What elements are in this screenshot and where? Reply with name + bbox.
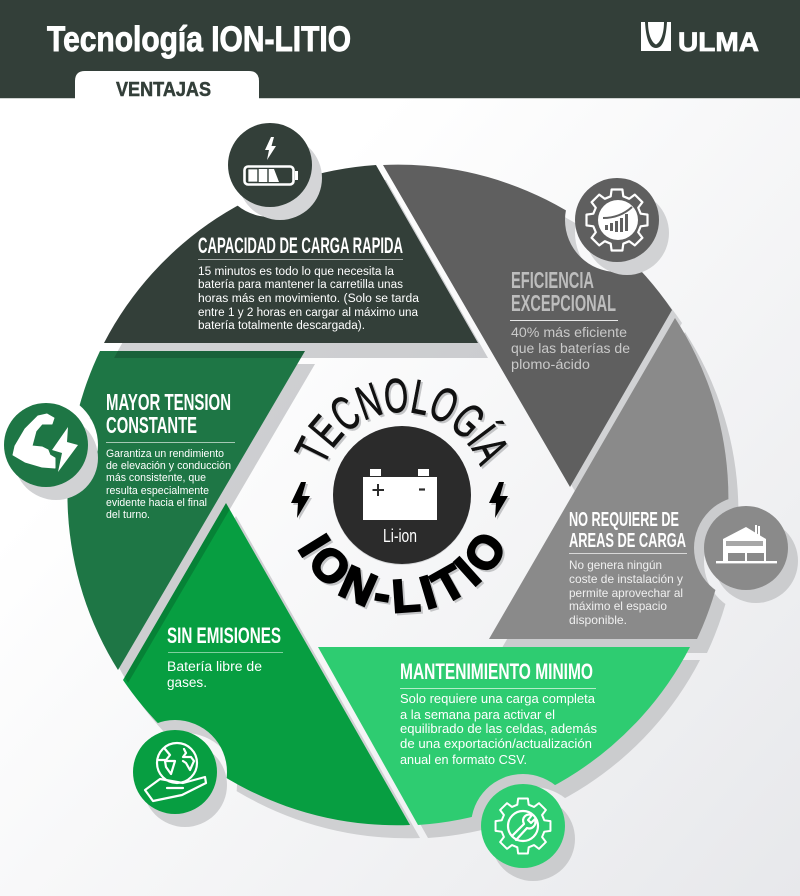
text: no requiere: No genera ningún	[569, 558, 662, 572]
text: eficiencia: 40% más eficiente	[511, 325, 627, 340]
text: mayor tension: resulta especialmente	[106, 485, 209, 497]
icon: gear with chart	[575, 178, 669, 275]
heading: mayor tension	[106, 389, 231, 438]
curved title: ION-LITIO	[298, 532, 505, 616]
text: mayor tension	[106, 448, 231, 521]
text: mantenimiento: de una exportación/actualización	[400, 737, 592, 751]
curved title: TECNOLOGÍA	[294, 378, 508, 469]
tab: ventajas	[75, 71, 259, 101]
text: mayor tension: más consistente, que	[106, 472, 206, 484]
text: eficiencia	[511, 325, 630, 372]
heading: mantenimiento minimo: MANTENIMIENTO MINIMO	[400, 659, 593, 684]
logo: ULMA	[641, 22, 759, 57]
text: capacidad: entre 1 y 2 horas en cargar al máximo una	[198, 307, 419, 319]
panel: mayor tension constante	[4, 351, 315, 683]
text: sin emisiones: gases.	[167, 675, 207, 690]
panel: capacidad de carga rapida	[104, 123, 488, 358]
text: capacidad	[198, 266, 420, 332]
text: no requiere: disponible.	[569, 613, 627, 627]
text: no requiere	[569, 558, 683, 627]
center badge	[291, 378, 510, 616]
text: capacidad: batería para mantener la carretilla unas	[198, 279, 403, 291]
text: sin emisiones: Batería libre de	[167, 659, 262, 674]
tab: ventajas: VENTAJAS	[116, 79, 211, 101]
text: eficiencia: que las baterías de	[511, 341, 630, 356]
icon: globe on hand	[133, 730, 227, 827]
text: capacidad: 15 minutos es todo lo que necesita la	[198, 266, 395, 278]
text: mayor tension: evidente hacia el final	[106, 497, 207, 509]
text: mantenimiento	[400, 692, 597, 767]
text: no requiere: máximo el espacio	[569, 599, 667, 613]
curved title	[291, 378, 510, 616]
heading: sin emisiones: SIN EMISIONES	[167, 623, 281, 648]
text: capacidad: batería totalmente descargada).	[198, 320, 365, 332]
heading: eficiencia excepcional: EFICIENCIA	[511, 267, 594, 293]
text: capacidad: horas más en movimiento. (Solo se tarda	[198, 293, 420, 305]
text: mayor tension: Garantiza un rendimiento	[106, 448, 224, 460]
heading: mayor tension: MAYOR TENSION	[106, 389, 231, 415]
icon: charging battery	[228, 123, 322, 220]
text: no requiere: coste de instalación y	[569, 572, 683, 586]
panel: eficiencia excepcional	[383, 165, 682, 500]
heading: no requiere: NO REQUIERE DE	[569, 509, 679, 531]
title: Tecnología ION-LITIO	[47, 20, 351, 59]
panel: no requiere de areas de carga	[489, 318, 798, 653]
heading: capacidad de carga: CAPACIDAD DE CARGA RAPIDA	[198, 233, 403, 258]
icon: li-ion battery	[363, 469, 437, 546]
text: eficiencia: plomo-ácido	[511, 357, 590, 372]
heading: eficiencia excepcional: EXCEPCIONAL	[511, 290, 616, 316]
text: mayor tension: del turno.	[106, 509, 150, 521]
heading: no requiere	[569, 509, 686, 552]
logo: ULMA: ULMA	[678, 27, 759, 57]
text: mantenimiento: anual en formato CSV.	[400, 753, 527, 767]
header bar	[0, 0, 800, 101]
panel: mantenimiento minimo	[318, 647, 700, 881]
icon: muscle and bolt	[4, 403, 98, 500]
text: mantenimiento: Solo requiere una carga completa	[400, 692, 595, 706]
icon: li-ion battery: Li-ion	[383, 526, 417, 546]
text: mantenimiento: a la semana para activar el	[400, 708, 555, 722]
text: mantenimiento: equilibrado de las celdas, además	[400, 722, 597, 736]
heading: eficiencia excepcional	[511, 267, 616, 316]
heading: no requiere: AREAS DE CARGA	[569, 530, 686, 552]
text: sin emisiones	[167, 659, 262, 690]
icon: warehouse	[704, 506, 798, 603]
icon: gear with wrench	[481, 784, 575, 881]
panel: sin emisiones	[123, 503, 420, 838]
text: no requiere: permite aprovechar al	[569, 586, 683, 600]
heading: mayor tension: CONSTANTE	[106, 412, 197, 438]
text: mayor tension: de elevación y conducción	[106, 460, 231, 472]
icon: left bolt	[291, 482, 310, 518]
icon: right bolt	[489, 482, 508, 518]
